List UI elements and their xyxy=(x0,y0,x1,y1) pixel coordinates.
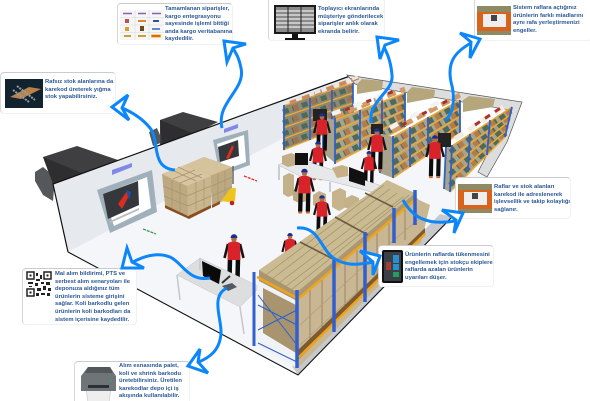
text: rack labels: Raflar ve stok alanları xyxy=(494,184,554,190)
icon: orange shelf label xyxy=(458,184,492,213)
text: expiry xyxy=(513,5,583,34)
text: picker screens: ekranda belirir. xyxy=(318,29,360,35)
worker near boxes xyxy=(295,169,314,213)
arrow: to goods receipt xyxy=(122,248,210,279)
card: restock alerts xyxy=(378,245,494,287)
icon: qr image xyxy=(5,79,43,108)
arrow: to cargo xyxy=(221,41,246,128)
back boxes on racks xyxy=(357,79,495,112)
text: restock alerts: raflarda azalan ürünlerin xyxy=(405,267,473,273)
rack left xyxy=(283,76,360,150)
text: picker screens xyxy=(318,6,384,35)
rack C xyxy=(444,105,512,192)
text: restock alerts: engellemek için stokçu ekiplere xyxy=(405,260,493,266)
text: rack labels: işlevsellik ve takip kolaylığı xyxy=(494,199,570,205)
right back wall xyxy=(347,75,522,177)
text: goods receipt: deponuza aldığınız tüm xyxy=(55,286,120,292)
worker back aisle 2 xyxy=(368,128,386,170)
text: rack labels xyxy=(494,184,570,213)
text: goods receipt: sistem içerisine kaydedilir. xyxy=(55,317,129,323)
text: label printing: üretebilirsiniz. Üretilen xyxy=(119,378,182,384)
icon: QR code xyxy=(26,271,52,297)
text: expiry: ürünlerin farklı miadlarını xyxy=(513,13,583,19)
rack A xyxy=(323,87,405,164)
text: cargo: Tamamlanan siparişler, xyxy=(165,6,229,12)
front pallet rack xyxy=(254,180,430,368)
text: goods receipt: Mal alım bildirimi, PTS ve xyxy=(55,271,125,277)
worker at reception xyxy=(224,234,244,280)
text: label printing: karekodlar depo içi iş xyxy=(119,386,179,392)
text: label printing xyxy=(119,363,182,399)
icon: tablet xyxy=(382,250,403,283)
icon: barcode printer xyxy=(81,367,116,401)
text: cargo xyxy=(165,6,232,42)
text: bulk stock: karekod üreterek yığma xyxy=(45,87,111,93)
left wall xyxy=(53,76,350,252)
floor marks xyxy=(143,176,257,234)
reception desk xyxy=(177,258,260,334)
text: picker screens: Toplayıcı ekranlarında xyxy=(318,6,379,12)
trucks behind the wall xyxy=(35,112,218,201)
card: goods receipt xyxy=(22,268,137,325)
dock door 1 xyxy=(97,163,157,233)
monitors on poles xyxy=(313,109,451,147)
rack B xyxy=(380,94,460,178)
icon: monitor xyxy=(274,5,316,40)
worker at second desk xyxy=(362,151,376,186)
text: rack labels: karekod ile adreslenerek xyxy=(494,192,562,198)
arrow: to picker screens xyxy=(371,37,399,123)
worker at centre desk xyxy=(310,141,326,179)
text: restock alerts: Ürünlerin raflarda tükenmesini xyxy=(405,252,490,258)
text: cargo: anda kargo veritabanına xyxy=(165,29,232,35)
card: bulk stock xyxy=(0,72,116,114)
text: label printing: akışında kullanılabilir. xyxy=(119,393,179,399)
arrow: to rack labels xyxy=(403,200,463,233)
card: expiry xyxy=(474,0,590,41)
text: cargo: sayesinde işlemi bittiği xyxy=(165,21,229,27)
text: goods receipt: serbest alım senaryoları ile xyxy=(55,279,130,285)
dock door 2 xyxy=(213,124,250,176)
card: label printing xyxy=(74,361,190,401)
text: goods receipt: ürünlerin sisteme girişini xyxy=(55,294,124,300)
text: picker screens: siparişler anlık olarak xyxy=(318,21,378,27)
floor band right xyxy=(292,214,452,375)
text: goods receipt: sağlar. Koli barkodlu gelen xyxy=(55,301,129,307)
text: rack labels: sağlanır. xyxy=(494,207,518,213)
worker back aisle 3 xyxy=(426,135,444,177)
arrow: to expiry xyxy=(445,33,480,120)
pallet boxes and jack xyxy=(162,157,236,219)
icon: cargo logos xyxy=(120,10,164,40)
arrow: to restock alerts xyxy=(297,228,380,275)
text: bulk stock xyxy=(45,79,114,100)
floor front edge xyxy=(68,217,452,375)
text: restock alerts: uyarıları düşer. xyxy=(405,275,447,281)
card: rack labels xyxy=(455,177,571,219)
card: cargo xyxy=(117,3,233,45)
text: bulk stock: stok yapabilirsiniz. xyxy=(45,94,97,100)
arrow: to bulk stock xyxy=(112,95,175,170)
floor xyxy=(68,100,488,375)
arrow: to label printing xyxy=(188,288,227,373)
text: expiry: aynı rafa yerleştirmenizi xyxy=(513,20,580,26)
worker back aisle 1 xyxy=(314,113,330,151)
text: expiry: engeller. xyxy=(513,28,537,34)
text: picker screens: müşteriye gönderilecek xyxy=(318,14,383,20)
text: cargo: kargo entegrasyonu xyxy=(165,14,221,20)
icon: orange shelf label xyxy=(477,6,511,35)
worker by front rack xyxy=(314,195,330,233)
centre packing desks xyxy=(278,153,382,211)
text: restock alerts xyxy=(405,251,493,281)
text: bulk stock: Rafsız stok alanlarına da xyxy=(45,79,113,85)
worker behind front rack xyxy=(282,233,298,270)
text: cargo: kaydedilir. xyxy=(165,36,194,42)
text: label printing: koli ve shrink barkodu xyxy=(119,371,181,377)
text: goods receipt: ürünlerin koli barkodları da xyxy=(55,309,130,315)
text: goods receipt xyxy=(55,271,130,323)
card: picker screens xyxy=(268,0,385,41)
text: label printing: Alım esnasında palet, xyxy=(119,363,179,369)
text: expiry: Sistem raflara açtığınız xyxy=(513,5,577,11)
